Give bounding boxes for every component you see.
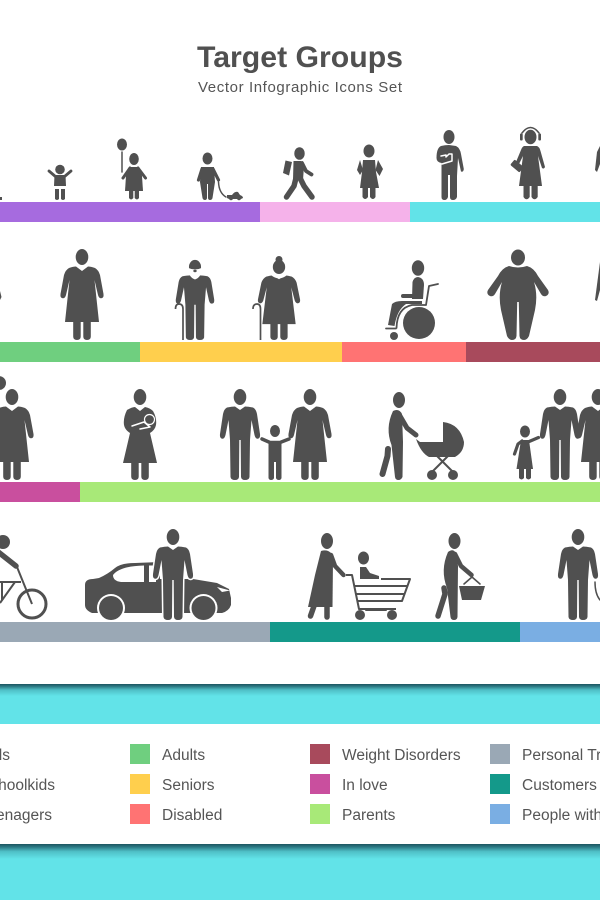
icon: man with stroller [382, 392, 464, 480]
icon: obese person [487, 250, 549, 340]
icon: man with car [85, 529, 231, 622]
icon: cyclist [0, 535, 46, 618]
icon: adult woman [60, 249, 104, 340]
legend column 2: Adults [162, 747, 205, 764]
panel: cyan band with shadow [0, 684, 600, 724]
bar row 3 [0, 482, 600, 502]
icon: parents with daughter [514, 389, 600, 480]
icon: woman with child in shopping cart [308, 533, 410, 620]
panel: lower cyan band with shadow [0, 844, 600, 900]
legend column 3: In love [342, 777, 388, 794]
icon: partial figure at left edge row 2 [0, 291, 2, 300]
icon: wheelchair user [386, 260, 438, 340]
icon: old man with cane [176, 260, 214, 340]
icon: partial figure at right edge row 2 [595, 262, 600, 301]
icon: mother with baby [123, 389, 157, 480]
legend column 2: Seniors [162, 777, 215, 794]
legend column 4 [490, 744, 600, 824]
icon: old woman with cane [253, 256, 300, 340]
legend column 3: Weight Disorders [342, 747, 461, 764]
icon: boy with toy car [198, 152, 243, 200]
icon: baby [49, 165, 71, 200]
icon: girl with balloon [117, 138, 146, 200]
bar row 2 [0, 342, 600, 362]
icon: teen girl with bags [357, 144, 383, 199]
subtitle: Vector Infographic Icons Set [198, 79, 403, 96]
bar row 4 [0, 622, 600, 642]
bar row 1 [0, 202, 600, 222]
legend column 3 [310, 744, 461, 824]
icon: family with child [220, 389, 332, 480]
title: Target Groups [197, 41, 403, 74]
legend column 4: Customers [522, 777, 597, 794]
legend column 1 [0, 747, 55, 824]
legend column 2 [130, 744, 222, 824]
icon: partial figure at left edge row 1 [0, 197, 2, 200]
icon: teen girl with headphones [510, 128, 545, 199]
icon: woman in love with heart [0, 376, 34, 480]
icon: man with basket [438, 533, 485, 620]
icon: partial figure at right edge row 1 [595, 146, 600, 172]
legend column 2: Disabled [162, 807, 222, 824]
icon: teen boy with book [436, 130, 464, 200]
legend column 3: Parents [342, 807, 396, 824]
icon: man with leash [558, 529, 600, 620]
icon: walking schoolkid [283, 147, 312, 197]
